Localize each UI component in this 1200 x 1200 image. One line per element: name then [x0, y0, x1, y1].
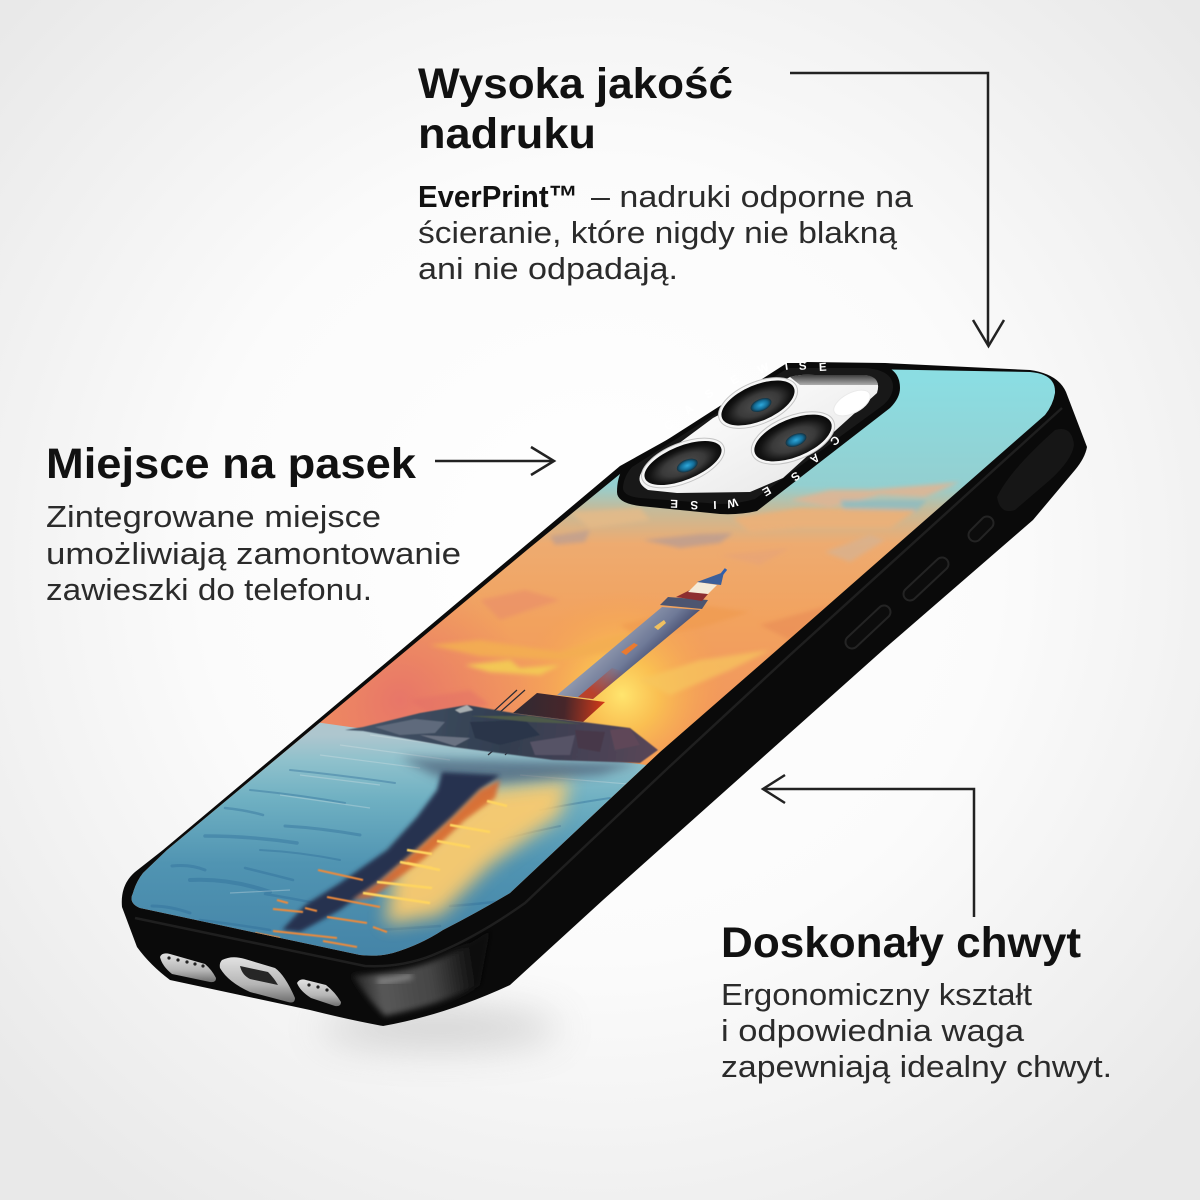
camera ring face [623, 368, 893, 504]
gallery deck [660, 597, 708, 609]
grip panel [997, 429, 1074, 511]
tower [557, 607, 700, 699]
body: ani nie odpadają. [418, 251, 678, 286]
camera island [617, 360, 900, 514]
phone case [122, 362, 1087, 1026]
body: – nadruki odporne na [591, 179, 914, 214]
orange reflection edge [352, 780, 500, 900]
arrow: grip [763, 775, 974, 917]
gloss highlight [378, 976, 412, 982]
flash [830, 385, 874, 421]
action button [975, 523, 987, 535]
volume up button [910, 564, 942, 594]
camera surround [617, 363, 900, 514]
roof [697, 572, 724, 585]
body: ścieranie, które nigdy nie blakną [418, 215, 898, 250]
printed artwork [132, 370, 1056, 956]
tower windows [621, 643, 638, 655]
body: zapewniają idealny chwyt. [721, 1049, 1112, 1084]
heading: Wysoka jakość [418, 60, 733, 108]
body: i odpowiednia waga [721, 1013, 1025, 1048]
volume down button [852, 612, 884, 642]
heading: nadruku [418, 110, 596, 158]
heading: Doskonały chwyt [721, 919, 1081, 967]
lamp [688, 582, 717, 594]
body: zawieszki do telefonu. [46, 572, 372, 607]
case body [122, 362, 1087, 1026]
body [721, 977, 1112, 1084]
body: umożliwiają zamontowanie [46, 536, 461, 571]
coral haze [317, 610, 500, 728]
body [418, 179, 914, 286]
body: EverPrint™ [418, 179, 578, 214]
camera window [639, 375, 878, 493]
antennas [488, 690, 530, 755]
body [46, 499, 461, 607]
lens left [635, 428, 731, 498]
sun glow [546, 626, 715, 777]
sky [132, 370, 1056, 956]
dark reflection band [282, 772, 500, 932]
dark rock reflection [400, 758, 640, 783]
sun reflection glow [385, 780, 570, 925]
text block: grip [721, 919, 1112, 1084]
lantern room [676, 590, 708, 601]
lens right [744, 401, 842, 475]
left speaker grille [160, 953, 216, 982]
heading: Miejsce na pasek [46, 440, 416, 488]
arrow: strap slot [435, 447, 554, 475]
charging port [220, 957, 295, 1002]
glossy bottom corner [352, 930, 490, 1016]
brand text bottom: CASEWISE [670, 433, 841, 510]
heading [418, 60, 733, 158]
body: Ergonomiczny kształt [721, 977, 1032, 1012]
rocks [345, 705, 658, 763]
arrow: top callout to print [790, 73, 1004, 346]
clouds [410, 482, 960, 715]
ripples [152, 770, 610, 930]
water [132, 722, 646, 956]
right speaker grille [297, 979, 341, 1006]
rim highlight line [135, 408, 1062, 966]
body: Zintegrowane miejsce [46, 499, 381, 534]
brand text top: CASEWISE [662, 360, 827, 433]
reflection streaks [363, 801, 507, 903]
tower base glow [578, 668, 625, 699]
text block: strap slot [46, 440, 461, 607]
lens top [711, 367, 805, 439]
phone drop shadow [320, 1010, 560, 1046]
text block: print quality [418, 60, 914, 286]
window shade [790, 375, 878, 385]
base building [513, 693, 605, 722]
spire [722, 569, 726, 574]
